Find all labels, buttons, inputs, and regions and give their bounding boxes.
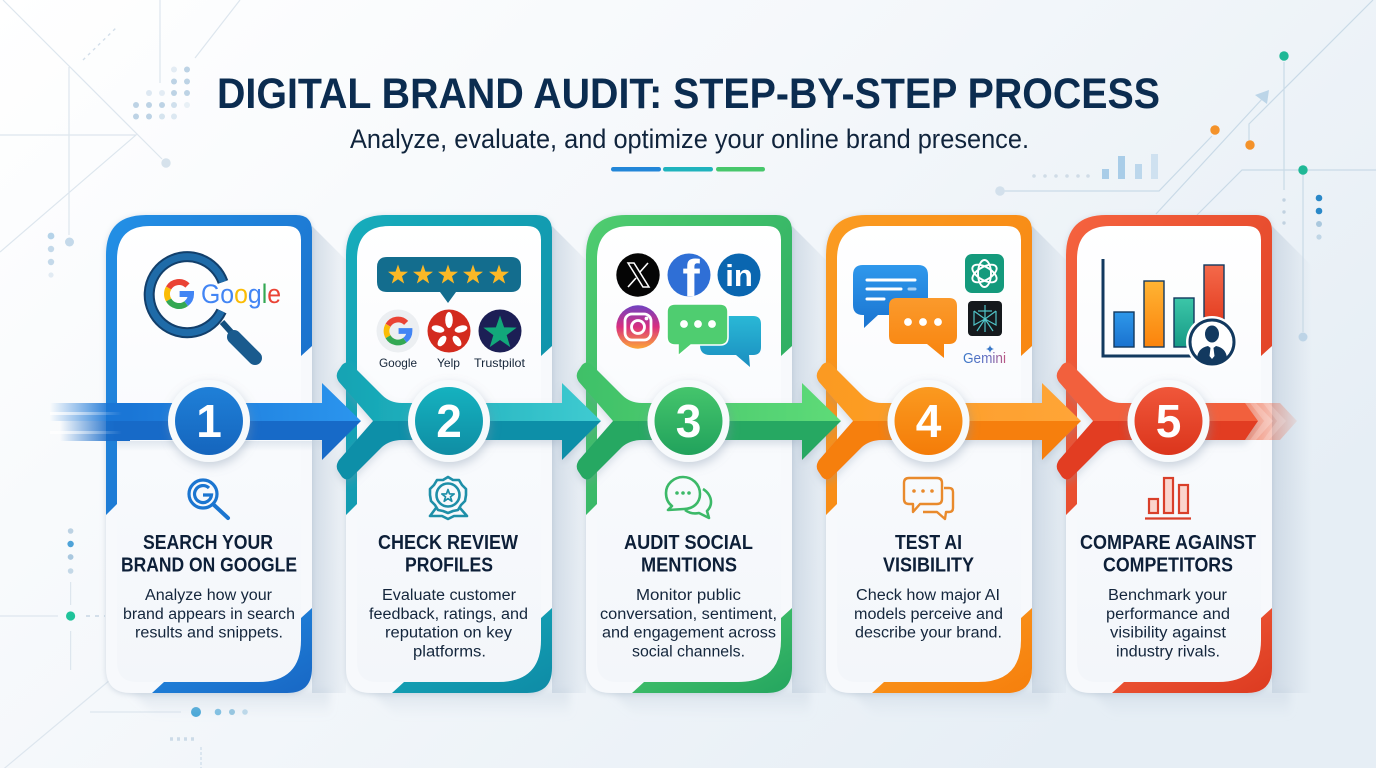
icon: Perplexity logo (968, 301, 1002, 336)
icon: Facebook logo (668, 254, 710, 296)
icon: LinkedIn logo: in (725, 258, 753, 293)
card shadows (130, 226, 1312, 716)
description: feedback, ratings, and (369, 606, 528, 623)
icon: Facebook logo: f (682, 250, 700, 308)
description: reputation on key (385, 624, 512, 642)
description: Monitor public (636, 587, 741, 604)
heading: CHECK REVIEW (378, 531, 519, 554)
platform labels: Yelp (437, 356, 460, 370)
badge 4: 4 (916, 395, 942, 447)
decorative network lines: top right with arrow (995, 0, 1376, 342)
arrow 5 (1057, 362, 1258, 480)
panel: step 5 compare against competitors (1066, 215, 1272, 693)
icon: chat bubbles (667, 304, 761, 367)
description: platforms. (413, 644, 486, 660)
heading (1080, 531, 1256, 576)
icon: Google badge (376, 310, 420, 352)
badge 4 (888, 380, 970, 462)
heading: COMPARE AGAINST (1080, 531, 1256, 554)
description (854, 587, 1003, 642)
arrow 1 (50, 383, 361, 460)
subtitle: Analyze, evaluate, and optimize your online brand presence. (350, 124, 1029, 154)
panel: step 1 search on Google (106, 215, 312, 693)
arrow 4 (817, 362, 1081, 480)
decorative network lines: top left (0, 0, 240, 278)
card body (586, 215, 792, 693)
icon: AI chat bubbles (853, 265, 957, 358)
card body (106, 215, 312, 693)
heading (121, 531, 297, 576)
platform labels (379, 356, 526, 370)
heading (883, 531, 974, 576)
arrow 5 fading tail (1240, 403, 1297, 440)
heading: TEST AI (895, 531, 962, 554)
heading (624, 531, 753, 576)
platform labels: Trustpilot (474, 356, 526, 370)
description: Evaluate customer (382, 587, 516, 604)
card body (826, 215, 1032, 693)
description: visibility against (1110, 624, 1227, 642)
icon: X logo (616, 253, 660, 297)
icon: Gemini logo: Gemini (963, 351, 1006, 367)
icon: small chat bubbles (666, 477, 711, 518)
heading: PROFILES (405, 554, 493, 576)
bar chart with person (1103, 259, 1238, 368)
icon: small G search (189, 480, 228, 518)
description: social channels. (632, 644, 745, 660)
icon: small award rosette (430, 477, 467, 519)
description: describe your brand. (855, 624, 1002, 642)
panel: step 4 test AI visibility (826, 215, 1032, 693)
icon: small AI chat bubbles (904, 478, 953, 519)
icon: star rating bubble (377, 257, 521, 303)
arrow 2 (337, 362, 601, 480)
description: results and snippets. (135, 624, 283, 642)
badge 1 (168, 380, 250, 462)
description: conversation, sentiment, (600, 606, 777, 623)
platform labels: Google (379, 356, 417, 370)
description (369, 587, 528, 660)
heading: BRAND ON GOOGLE (121, 554, 297, 576)
card body (346, 215, 552, 693)
heading: SEARCH YOUR (143, 531, 273, 554)
panel: step 2 check review profiles (346, 215, 552, 693)
description: Benchmark your (1108, 587, 1227, 604)
description: and engagement across (602, 624, 776, 642)
badge 3 (648, 380, 730, 462)
description: Analyze how your (145, 587, 272, 604)
title: DIGITAL BRAND AUDIT: STEP-BY-STEP PROCESS (217, 70, 1160, 118)
title underline (611, 167, 765, 172)
icon: Yelp badge (428, 310, 470, 352)
badge 5: 5 (1156, 395, 1181, 447)
card body (1066, 215, 1272, 693)
icon: small bar chart (1145, 478, 1191, 518)
heading: AUDIT SOCIAL (624, 531, 753, 554)
heading (378, 531, 519, 576)
icon: LinkedIn logo (718, 254, 760, 296)
badge 2 (408, 380, 490, 462)
description (123, 587, 295, 642)
description: industry rivals. (1116, 644, 1220, 660)
process arrows with numbered badges (50, 362, 1297, 480)
description (600, 587, 777, 660)
heading: VISIBILITY (883, 554, 974, 576)
heading: MENTIONS (641, 554, 737, 576)
panel: step 3 audit social mentions (586, 215, 792, 693)
badge 2: 2 (436, 395, 462, 447)
description: Check how major AI (856, 587, 1000, 604)
heading: COMPETITORS (1103, 554, 1233, 576)
icon: Trustpilot badge (478, 310, 522, 352)
decorative network lines: bottom left (0, 528, 248, 768)
icon: Gemini logo (963, 345, 1006, 367)
icon: ChatGPT logo (965, 254, 1004, 293)
badge 1: 1 (196, 395, 222, 447)
description (1106, 587, 1230, 660)
icon: Google magnifier: Google (201, 279, 281, 309)
description: brand appears in search (123, 606, 295, 623)
badge 3: 3 (676, 395, 701, 447)
description: performance and (1106, 606, 1230, 623)
description: models perceive and (854, 606, 1003, 623)
icon: Google magnifier (149, 257, 281, 358)
arrow 3 (577, 362, 841, 480)
badge 5 (1128, 380, 1210, 462)
icon: Instagram logo (616, 305, 660, 349)
